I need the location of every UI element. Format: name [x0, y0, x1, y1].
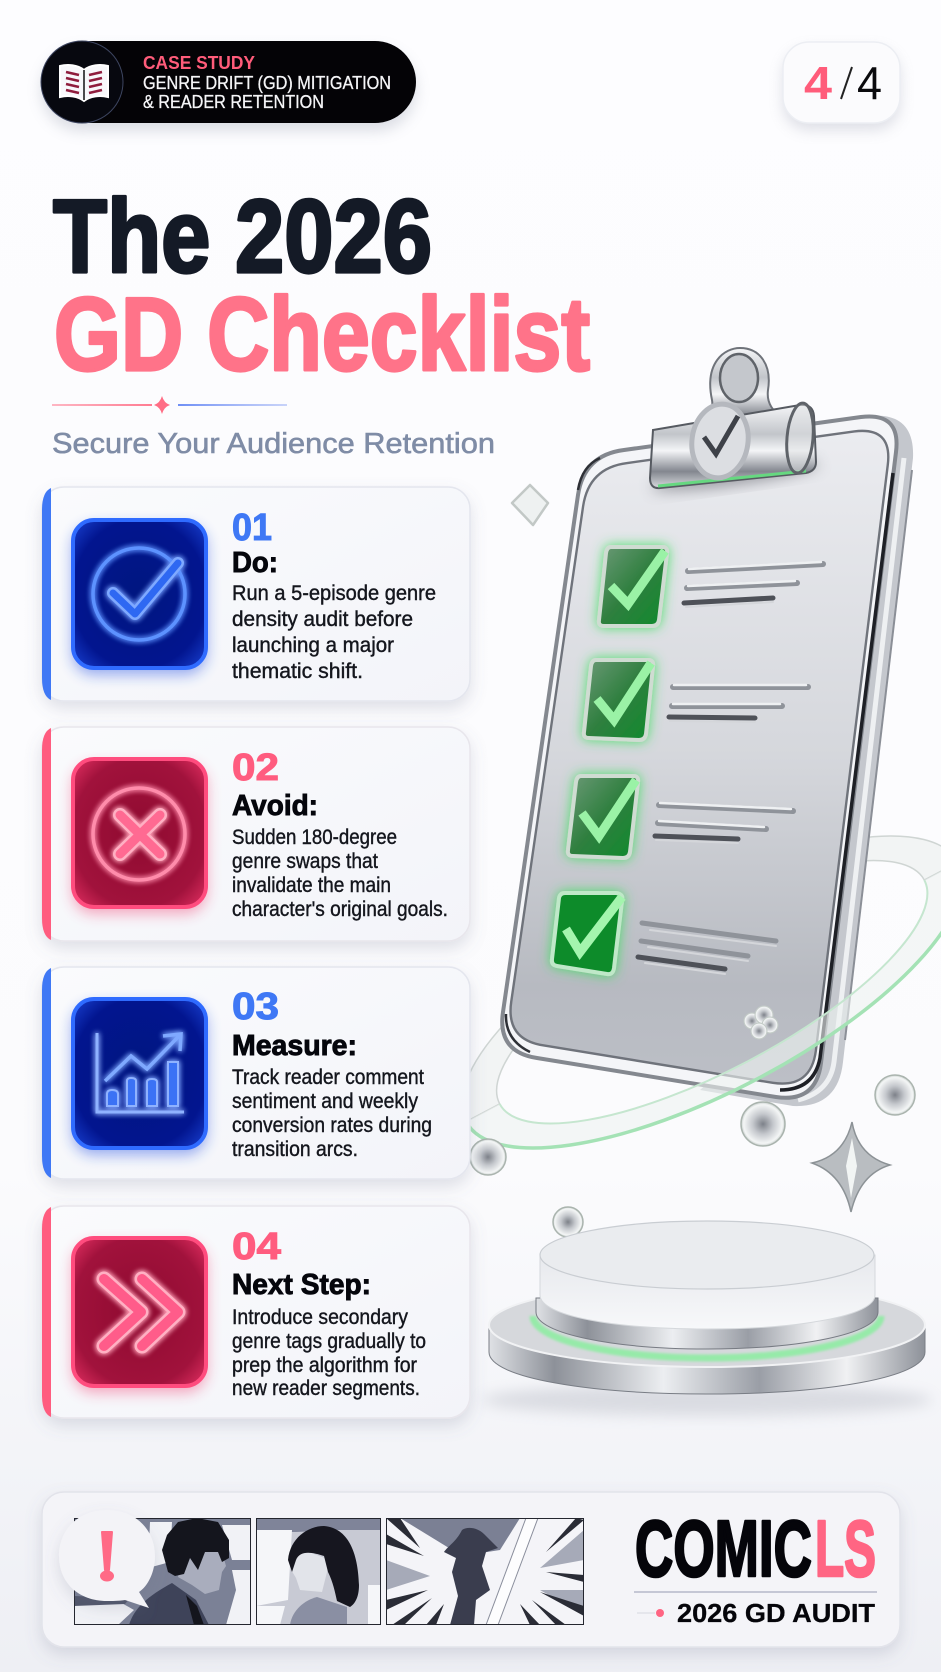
- page badge 4/4: 4: [804, 57, 832, 109]
- clipboard corner glints: [506, 458, 600, 1052]
- card 02 body: [232, 826, 448, 921]
- panel: card 01 Do: 01: [232, 507, 272, 549]
- text lines 4: [638, 923, 776, 974]
- brand logo: LS: [815, 1504, 876, 1593]
- footer panel: [42, 1492, 900, 1647]
- card 01 body: Run a 5-episode genre: [232, 582, 436, 605]
- sparkle star: [812, 1122, 890, 1212]
- card 03 body: Track reader comment: [232, 1066, 424, 1089]
- panel: card 04 Next Step: 04: [232, 1226, 281, 1268]
- header pill: case study: [41, 41, 416, 131]
- comic panel 1: man: [74, 1518, 251, 1625]
- card 02 body: invalidate the main: [232, 874, 391, 897]
- card 02 body: genre swaps that: [232, 850, 378, 873]
- text lines 1: [684, 562, 823, 607]
- icon: neon chevrons: [72, 1238, 207, 1393]
- checkbox 2: [584, 660, 653, 740]
- text lines 2: [669, 685, 808, 722]
- sphere on pedestal: [553, 1207, 583, 1237]
- panel: card 02 Avoid: [42, 727, 470, 941]
- audit tag: 2026 GD AUDIT: [677, 1598, 875, 1628]
- card 04 body: new reader segments.: [232, 1377, 420, 1400]
- crystal: [512, 485, 548, 525]
- card 04 body: prep the algorithm for: [232, 1354, 417, 1377]
- panel: card 01 Do: Do:: [232, 547, 278, 579]
- clipboard side edge: [700, 416, 913, 1106]
- comic panel 3: action burst: [386, 1518, 584, 1625]
- clipboard frame: [502, 416, 897, 1098]
- orbit ring front half: [466, 862, 941, 1208]
- title: [53, 179, 590, 393]
- comic strip: [74, 1518, 584, 1625]
- speech bubble with exclamation: [59, 1510, 155, 1608]
- pedestal: [482, 1221, 932, 1416]
- pill text line 1: GENRE DRIFT (GD) MITIGATION: [143, 73, 391, 93]
- checkbox 3: [568, 776, 638, 858]
- icon: neon growth chart: [72, 999, 207, 1155]
- sphere left: [470, 1139, 506, 1175]
- divider with diamond: [52, 396, 287, 414]
- card 04 body: [232, 1306, 426, 1400]
- page badge 4/4: 4: [857, 57, 882, 109]
- card 01 body: launching a major: [232, 634, 394, 657]
- icon: open book: [41, 41, 123, 123]
- title: The 2026: [53, 179, 432, 295]
- checkbox 4: [552, 893, 622, 974]
- metal clip: [650, 348, 820, 497]
- card 01 body: [232, 582, 436, 683]
- checkbox 1: [599, 547, 667, 626]
- card 03 body: [232, 1066, 432, 1161]
- sphere right: [875, 1075, 915, 1115]
- card 02 body: character's original goals.: [232, 898, 448, 921]
- panel: card 04 Next Step: [42, 1206, 470, 1418]
- orbit ring back half: [420, 776, 941, 1122]
- sphere centre: [741, 1102, 785, 1146]
- card 03 body: conversion rates during: [232, 1114, 432, 1137]
- page badge 4/4: [783, 42, 900, 130]
- panel: card 02 Avoid: 02: [232, 747, 279, 789]
- card 02 body: Sudden 180-degree: [232, 826, 397, 849]
- card 01 body: density audit before: [232, 608, 413, 631]
- icon: neon cross: [72, 759, 207, 914]
- pill label: CASE STUDY: [143, 53, 255, 73]
- clipboard plate: [511, 431, 888, 1084]
- water droplet cluster: [744, 1006, 778, 1039]
- panel: card 03 Measure: Measure:: [232, 1030, 357, 1062]
- illustration: clipboard scene: [420, 348, 941, 1416]
- panel: card 04 Next Step: Next Step:: [232, 1269, 371, 1301]
- icon: neon check: [72, 520, 207, 675]
- clipboard dark right rim: [780, 473, 893, 1090]
- pill text line 2: & READER RETENTION: [143, 92, 324, 112]
- panel: card 01 Do: [42, 487, 470, 701]
- card 04 body: Introduce secondary: [232, 1306, 408, 1329]
- card 03 body: sentiment and weekly: [232, 1090, 418, 1113]
- card 04 body: genre tags gradually to: [232, 1330, 426, 1353]
- card 01 body: thematic shift.: [232, 660, 363, 683]
- panel: card 03 Measure: 03: [232, 986, 279, 1028]
- comic panel 2: woman: [256, 1518, 381, 1625]
- panel: card 02 Avoid: Avoid:: [232, 790, 318, 822]
- card 03 body: transition arcs.: [232, 1138, 358, 1161]
- subtitle: Secure Your Audience Retention: [52, 428, 495, 460]
- brand logo: COMIC: [635, 1504, 812, 1593]
- text lines 3: [655, 803, 793, 843]
- panel: card 03 Measure: [42, 967, 470, 1179]
- title: GD Checklist: [54, 277, 590, 393]
